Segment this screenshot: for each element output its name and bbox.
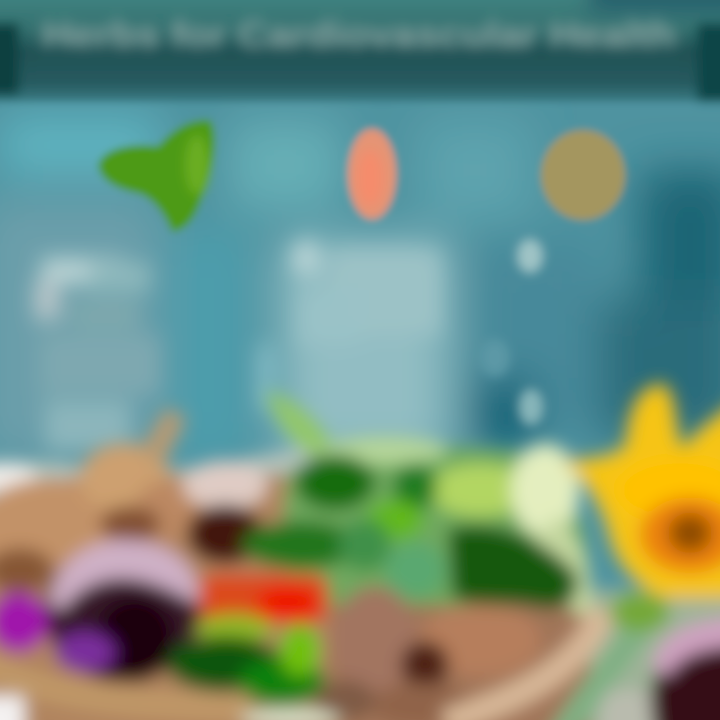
text block: left column xyxy=(35,258,160,450)
photo: plum lower right xyxy=(650,616,720,720)
photo: green pepper xyxy=(167,614,326,706)
icon: tan round seed xyxy=(541,130,625,220)
title: Herbs for Cardiovascular Health xyxy=(42,14,676,55)
photo: mushrooms and nuts left xyxy=(0,408,267,592)
photo: pale leaves top xyxy=(266,392,590,618)
photo: brown mushrooms lower xyxy=(315,586,540,720)
photo: food bowl scene xyxy=(0,384,720,720)
text block: right column xyxy=(480,239,543,425)
photo: yellow flower xyxy=(562,384,720,598)
photo: purple onion xyxy=(0,540,200,682)
photo: dark green herbs xyxy=(242,454,579,609)
icon: green herb leaf xyxy=(98,120,215,232)
header band xyxy=(0,0,720,102)
photo: red pepper xyxy=(200,574,328,622)
photo: green stem xyxy=(558,592,670,720)
photo: bowl background xyxy=(0,447,720,720)
text block: center column xyxy=(258,240,440,410)
photo: wicker basket rim xyxy=(0,610,602,720)
icon: salmon capsule xyxy=(348,129,396,219)
